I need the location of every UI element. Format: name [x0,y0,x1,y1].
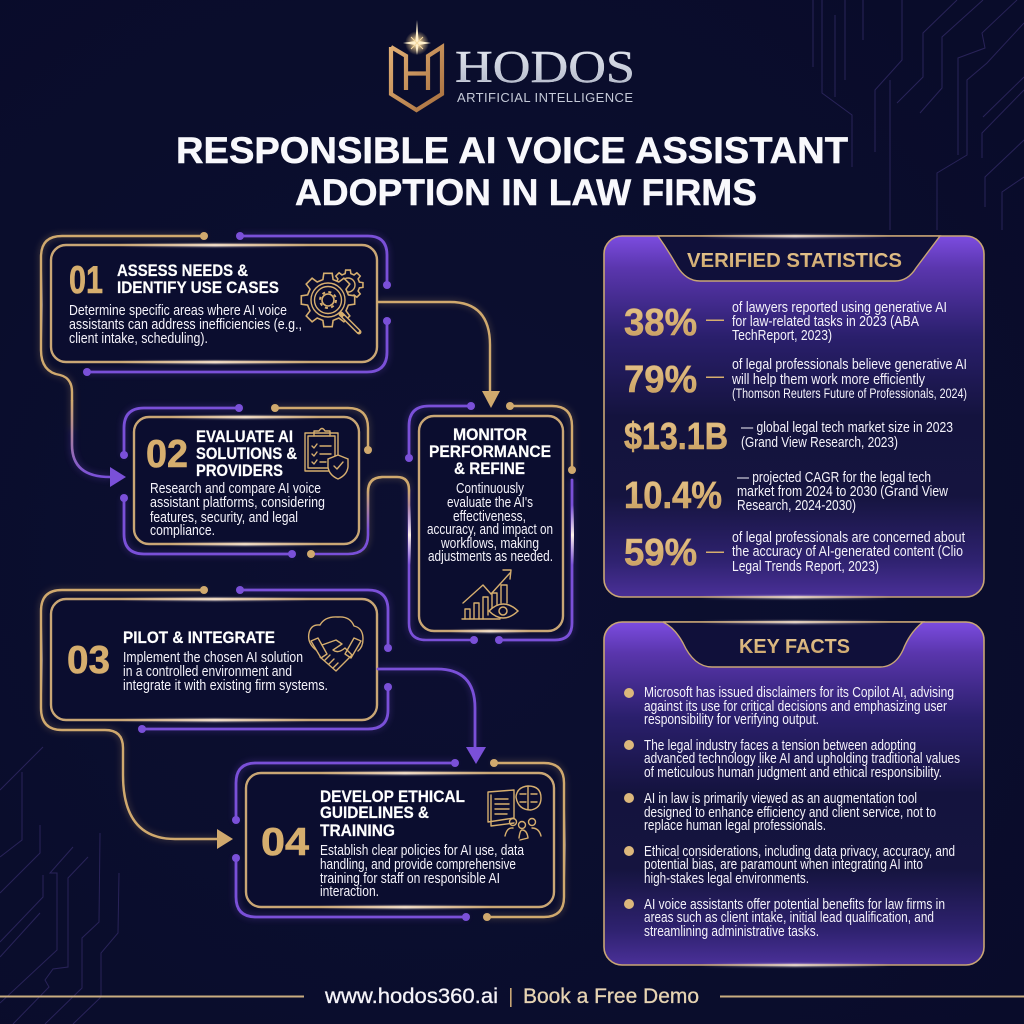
fact: Microsoft disclaimers: responsibility for verifying output. [644,711,819,728]
box outline [51,599,377,720]
heading: DEVELOP ETHICAL [320,787,465,806]
description: evaluate the AI's [447,494,533,511]
heading: PILOT & INTEGRATE [123,628,275,647]
heading [196,427,297,480]
edge highlights [40,598,310,722]
fact: potential benefits: areas such as client intake, initial lead qualification, and [644,909,934,926]
description [69,302,302,347]
stat: $13.1B: — global legal tech market size in 2023 [741,419,953,436]
description: Implement the chosen AI solution [123,649,303,666]
panel background [604,622,984,965]
description: effectiveness, [453,508,526,525]
description: in a controlled environment and [123,663,292,680]
heading [320,787,465,840]
description: handling, and provide comprehensive [320,856,516,873]
call to action: Book a Free Demo [523,985,699,1008]
title: RESPONSIBLE AI VOICE ASSISTANT [176,130,848,171]
stat: 59%: the accuracy of AI-generated content (Clio [732,543,963,560]
fact: augmentation tool [624,790,936,834]
fact: potential benefits [624,896,945,940]
number: 02 [146,433,188,476]
stat: 38%: for law-related tasks in 2023 (ABA [732,313,919,330]
panel: step 01 assess needs [40,232,391,400]
fact: ethical considerations: high-stakes legal environments. [644,870,809,887]
panel: key facts [604,621,984,966]
description [150,480,325,539]
outer purple paths [83,232,391,376]
description: adjustments as needed. [428,548,553,565]
fact: potential benefits: streamlining administrative tasks. [644,923,819,940]
description: assistants can address inefficiencies (e.g., [69,316,302,333]
description: Continuously [456,480,524,497]
heading: EVALUATE AI [196,427,293,446]
heading tab [663,622,923,667]
website: www.hodos360.ai [324,985,498,1008]
stat: 59%: Legal Trends Report, 2023) [732,558,879,575]
description [320,842,525,900]
description: features, security, and legal [150,509,298,526]
outer paths [232,759,564,921]
heading: PROVIDERS [196,461,283,480]
stat: $13.1B [624,416,953,458]
edge highlights [700,235,890,598]
description: interaction. [320,883,379,900]
fact: augmentation tool: designed to enhance efficiency and client service, not to [644,804,936,821]
heading: SOLUTIONS & [196,444,297,463]
description: compliance. [150,522,215,539]
icon: gears and magnifier [301,270,363,332]
arrow: step 01 to step 02 [72,400,126,487]
stat: $13.1B: $13.1B [624,416,728,458]
heading [429,425,551,478]
heading: PERFORMANCE [429,442,551,461]
stat: 59%: of legal professionals are concerned about [732,529,966,546]
icon: book, brain and people [488,786,541,840]
edge highlights [320,772,566,908]
description: Determine specific areas where AI voice [69,302,287,319]
fact: augmentation tool: replace human legal professionals. [644,817,826,834]
heading: GUIDELINES & [320,803,429,822]
panel: step 03 pilot [40,586,392,733]
stat: 10.4%: market from 2024 to 2030 (Grand View [737,483,948,500]
footer [0,985,1024,1008]
heading: ASSESS NEEDS & [117,261,248,280]
fact: potential benefits: AI voice assistants offer potential benefits for law firms in [644,896,945,913]
description: accuracy, and impact on [427,521,553,538]
title: ADOPTION IN LAW FIRMS [295,172,757,213]
stat: 59%: 59% [624,532,697,574]
number: 01 [69,259,103,302]
heading: KEY FACTS [739,636,850,658]
stat: 79%: 79% [624,359,697,401]
title [176,130,848,213]
edge highlights [170,416,320,546]
number: 03 [67,639,110,682]
stat: 38% [624,299,947,344]
icon: clipboard and shield [305,428,348,479]
icon: growth chart and eye [462,570,518,619]
panel: step 04 ethical guidelines [232,759,566,921]
heading: & REFINE [454,459,525,478]
outer gold path [41,236,204,400]
heading: MONITOR [453,425,527,444]
fact: Microsoft disclaimers: against its use for critical decisions and emphasizing user [644,698,947,715]
number: 04 [261,821,309,864]
description: training for staff on responsible AI [320,870,500,887]
heading tab [658,236,940,281]
description: Research and compare AI voice [150,480,321,497]
logo [391,20,635,110]
panel: monitor performance [405,402,576,644]
outer purple paths [138,586,392,733]
description: Establish clear policies for AI use, data [320,842,525,859]
panel: step 02 evaluate [120,404,372,558]
stat: 79% [624,356,967,401]
panel: verified statistics [604,235,984,598]
fact: Microsoft disclaimers [624,684,954,728]
stat: $13.1B: (Grand View Research, 2023) [741,434,898,451]
fact: industry tension [624,737,960,781]
description: workflows, making [440,535,539,552]
stat: 10.4% [624,469,948,517]
icon: cloud and handshake [309,617,363,671]
stat: 38%: 38% [624,302,697,344]
heading [117,261,279,297]
edge highlight [450,630,530,632]
fact: Microsoft disclaimers: Microsoft has issued disclaimers for its Copilot AI, advising [644,684,954,701]
description: client intake, scheduling). [69,330,208,347]
fact: industry tension: of meticulous human judgment and ethical responsibility. [644,764,942,781]
description [123,649,328,694]
stat: 10.4%: — projected CAGR for the legal tech [737,469,931,486]
outer paths [405,402,576,644]
description: assistant platforms, considering [150,494,325,511]
fact: augmentation tool: AI in law is primarily viewed as an augmentation tool [644,790,917,807]
box outline [51,245,377,362]
stat: 10.4%: Research, 2024-2030) [737,497,856,514]
outer paths [120,404,372,558]
connector: step 02 to monitor [307,477,478,644]
arrow: step 03 to ethics step [378,669,486,764]
arrow: step 03 to step 04 [41,586,233,849]
panel background [604,236,984,597]
description [427,480,553,565]
stat: 38%: of lawyers reported using generative AI [732,299,947,316]
stat: 79%: will help them work more efficiently [731,371,925,388]
wordmark: HODOS [455,42,635,92]
stat: 79%: of legal professionals believe generative AI [732,356,967,373]
stat: 38%: TechReport, 2023) [732,327,832,344]
connector glows [41,236,572,917]
box outline [246,773,554,907]
fact: industry tension: The legal industry faces a tension between adopting [644,737,916,754]
arrow: step 01 to monitor [378,302,500,408]
edge highlights [40,244,310,364]
heading: IDENTIFY USE CASES [117,278,279,297]
edge highlights [700,621,890,966]
fact: ethical considerations: potential bias, are paramount when integrating AI into [644,856,923,873]
tagline: ARTIFICIAL INTELLIGENCE [457,90,633,105]
description: integrate it with existing firm systems. [123,677,328,694]
box outline [134,417,359,544]
heading: TRAINING [320,821,395,840]
stat: 10.4%: 10.4% [624,475,722,517]
icon: shield with H and star [391,20,442,110]
separator [510,988,512,1007]
stat: 59% [624,529,966,575]
fact: ethical considerations [624,843,955,887]
heading: VERIFIED STATISTICS [687,250,902,272]
box outline [419,416,563,631]
